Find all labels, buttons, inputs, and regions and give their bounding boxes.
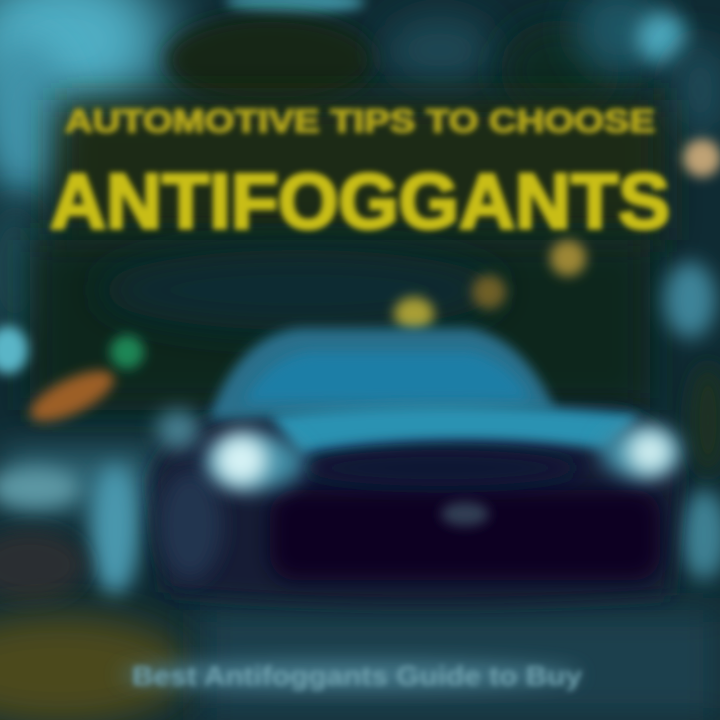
bokeh lights xyxy=(394,139,720,331)
dark foliage behind title xyxy=(55,100,665,240)
title line 2: ANTIFOGGANTS xyxy=(50,157,670,245)
car grille xyxy=(270,490,660,580)
car body xyxy=(150,410,680,604)
icon: carrot shape xyxy=(23,335,144,431)
title line 1: AUTOMOTIVE TIPS TO CHOOSE xyxy=(65,103,655,139)
right headlight xyxy=(600,426,680,478)
left fender xyxy=(158,470,222,580)
title xyxy=(50,103,670,245)
road and foreground xyxy=(0,450,720,720)
caption: Best Antifoggants Guide to Buy xyxy=(132,661,582,691)
car xyxy=(150,328,680,604)
car hood xyxy=(270,405,640,455)
left headlight xyxy=(205,434,305,490)
windscreen xyxy=(245,352,530,402)
car roof xyxy=(208,328,555,420)
